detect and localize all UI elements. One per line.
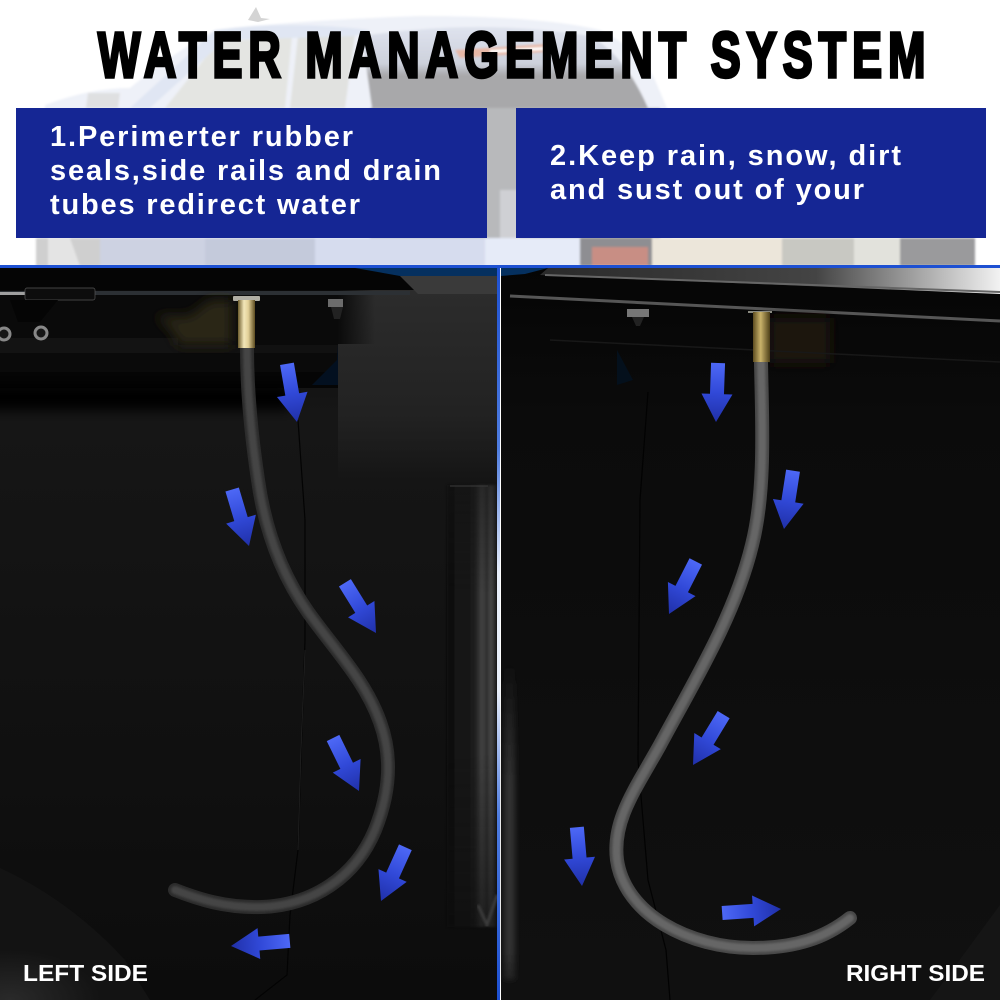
label: right side: RIGHT SIDE <box>846 960 985 986</box>
lower body band <box>36 238 100 266</box>
seam <box>255 420 305 1000</box>
title: WATER MANAGEMENT SYSTEM <box>98 19 925 91</box>
right brass fitting <box>748 311 772 362</box>
right drain hose <box>616 362 850 948</box>
left drain hose <box>175 348 388 907</box>
panel: callout 1: seals,side rails and drain <box>50 155 441 187</box>
panel: callout 2 <box>516 108 986 238</box>
panel: right side photo <box>501 268 1000 1000</box>
left brass fitting <box>233 296 260 348</box>
embossed ridge <box>470 485 496 927</box>
wheel well <box>0 868 150 1000</box>
panel: callout 2: and sust out of your <box>550 174 864 206</box>
arrows: left side flow <box>217 361 419 961</box>
rollers <box>0 327 47 340</box>
frame: blue dividers <box>0 265 1000 1000</box>
clip <box>328 299 343 319</box>
clip <box>627 309 649 326</box>
seam <box>638 392 670 1000</box>
panel: callout 1: tubes redirect water <box>50 189 360 221</box>
panel: callout 2: 2.Keep rain, snow, dirt <box>550 140 901 172</box>
rail bracket <box>25 288 95 300</box>
panel: left side photo <box>0 268 498 1000</box>
panel: callout 1: 1.Perimerter rubber <box>50 121 353 153</box>
label: left side: LEFT SIDE <box>23 960 148 986</box>
panel: callout 1 <box>16 108 487 238</box>
arrows: right side flow <box>561 362 808 928</box>
background: faded pickup truck <box>0 0 1000 268</box>
